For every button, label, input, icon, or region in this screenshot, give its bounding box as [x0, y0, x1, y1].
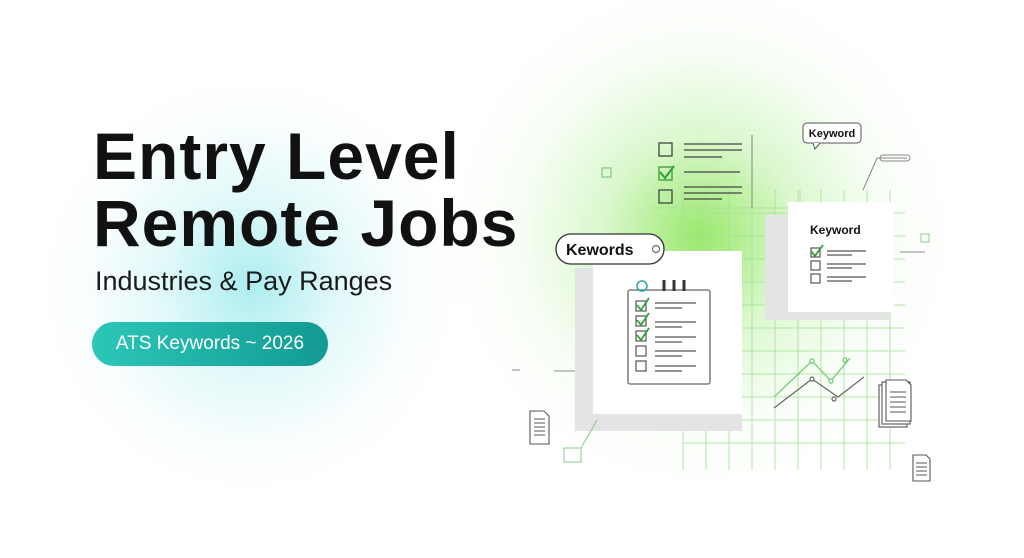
right card — [765, 202, 894, 320]
top checklist — [602, 135, 752, 208]
keyword bubble small: Keyword — [809, 128, 855, 140]
left card — [575, 251, 742, 431]
title — [93, 119, 518, 260]
title: Remote Jobs — [93, 186, 518, 260]
pill badge — [92, 322, 328, 366]
document icons — [530, 380, 930, 481]
subtitle: Industries & Pay Ranges — [95, 266, 392, 296]
pill badge: ATS Keywords ~ 2026 — [116, 333, 304, 354]
Kewords tag — [556, 234, 664, 264]
title: Entry Level — [93, 119, 460, 193]
right card: Keyword — [810, 223, 861, 237]
Kewords tag: Kewords — [566, 242, 634, 259]
keyword bubble small — [803, 123, 861, 149]
line chart — [774, 358, 864, 408]
